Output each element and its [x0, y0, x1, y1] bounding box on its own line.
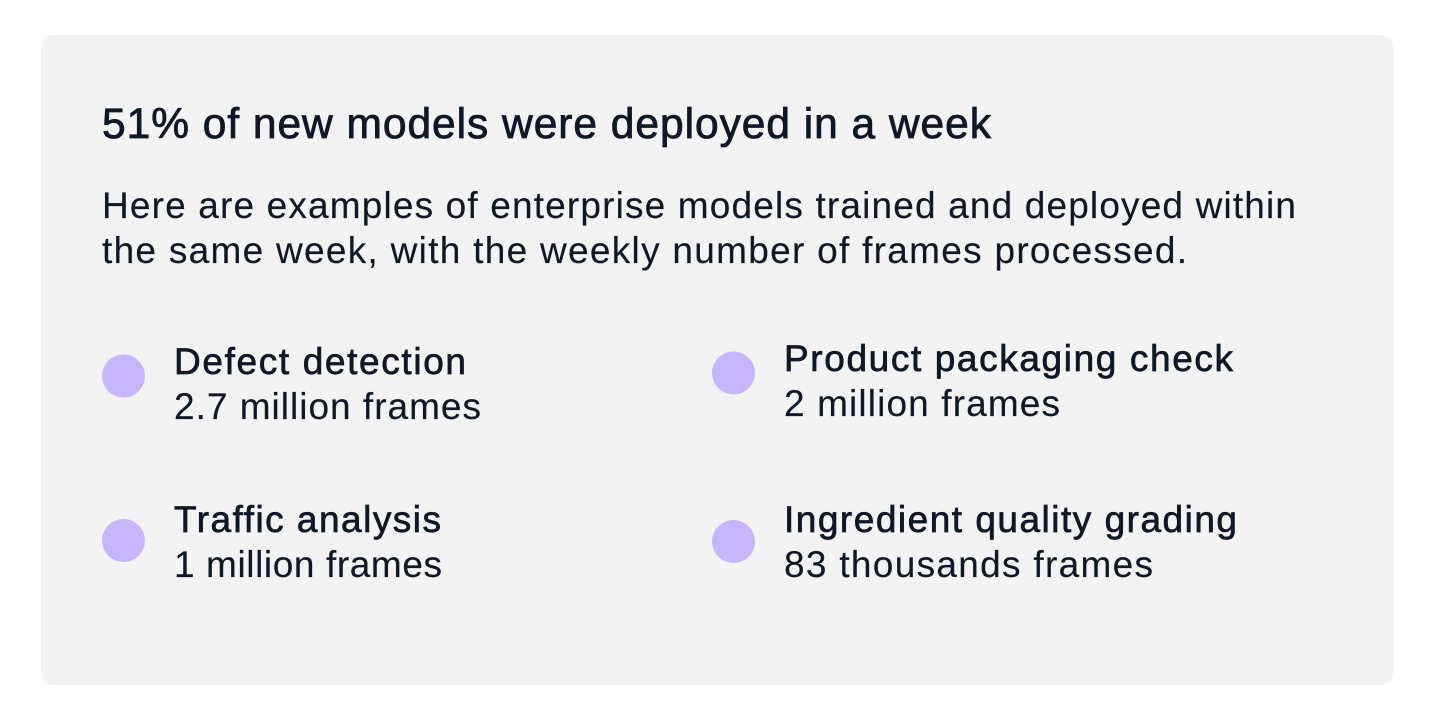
- item: traffic analysis: [102, 499, 442, 585]
- item: product packaging check: [712, 338, 1234, 424]
- item value: 83 thousands frames: [784, 544, 1153, 585]
- intro text: Here are examples of enterprise models trained and deployed within: [102, 185, 1296, 226]
- item label: Product packaging check: [784, 338, 1234, 379]
- intro text: the same week, with the weekly number of frames processed.: [102, 230, 1187, 271]
- icon: bullet: [102, 354, 145, 398]
- item: defect detection: [102, 341, 481, 427]
- item label: Traffic analysis: [174, 499, 441, 540]
- icon: bullet: [102, 519, 145, 562]
- item value: 1 million frames: [174, 544, 442, 585]
- icon: bullet: [712, 520, 755, 563]
- title: 51% of new models were deployed in a week: [102, 101, 992, 148]
- item label: Defect detection: [174, 341, 466, 382]
- item value: 2 million frames: [784, 383, 1060, 424]
- intro text: [102, 185, 1296, 271]
- item label: Ingredient quality grading: [784, 499, 1237, 540]
- item: ingredient quality grading: [712, 499, 1237, 585]
- item value: 2.7 million frames: [174, 386, 481, 427]
- icon: bullet: [712, 352, 755, 394]
